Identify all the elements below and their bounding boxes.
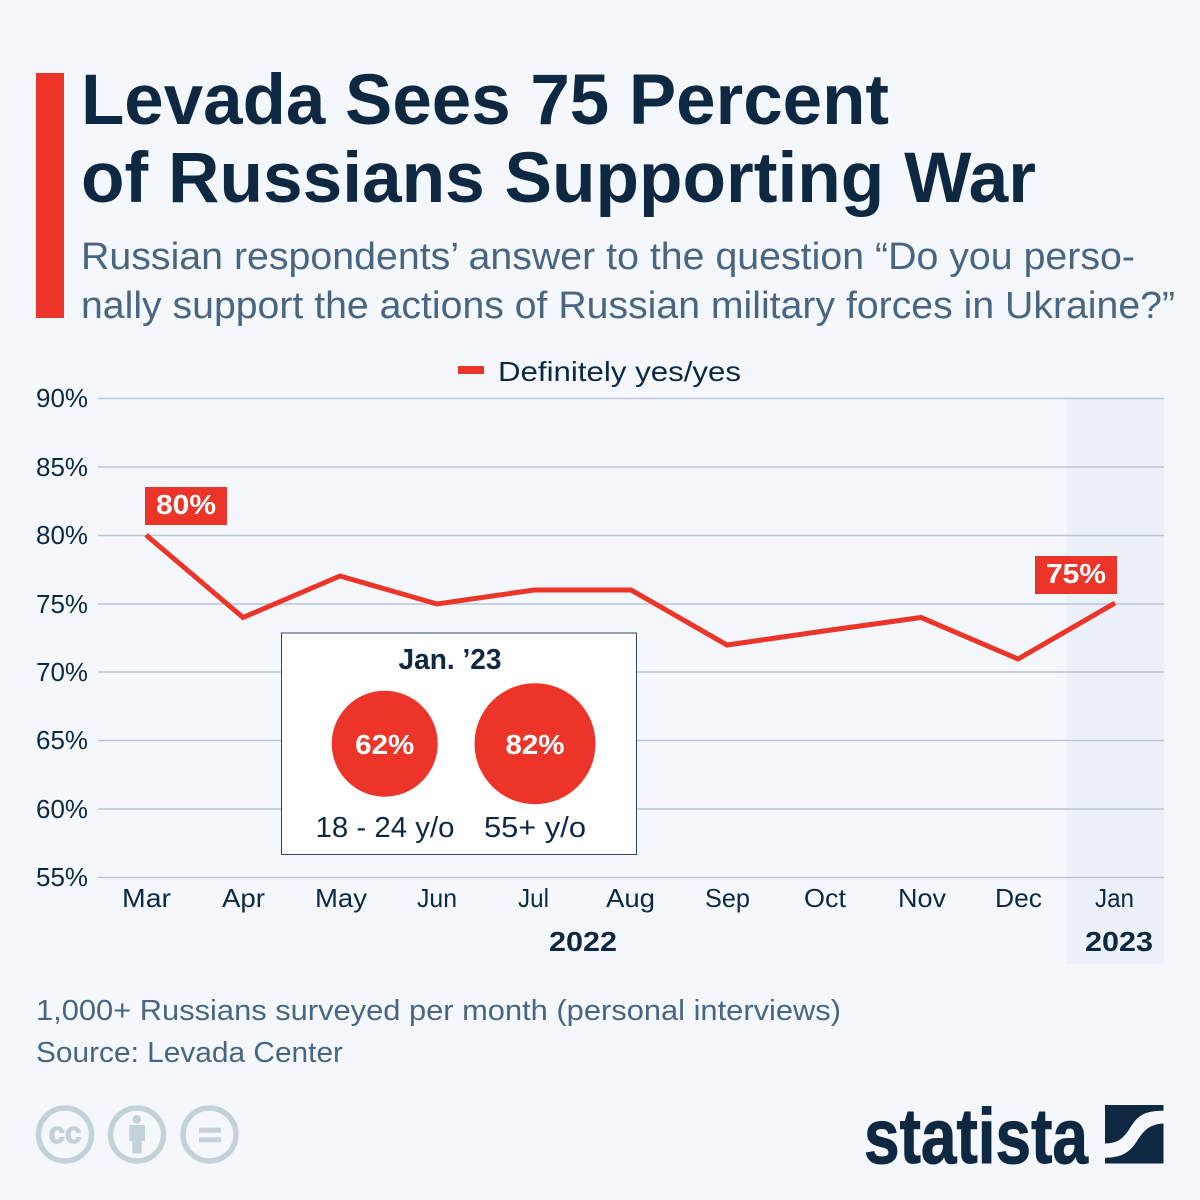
x axis month labels: Jun xyxy=(417,883,457,913)
y axis labels xyxy=(36,383,88,892)
x axis month labels: Oct xyxy=(804,883,847,913)
title: of Russians Supporting War xyxy=(81,139,1036,218)
accent bar xyxy=(36,73,64,318)
logo: statista: statista xyxy=(864,1092,1088,1180)
data label: 80% xyxy=(145,487,227,525)
subtitle: Russian respondents’ answer to the question “Do you perso- xyxy=(81,236,1135,278)
grid lines xyxy=(98,398,1164,878)
icon: cc xyxy=(38,1108,92,1161)
x axis month labels xyxy=(122,883,1134,913)
title: Levada Sees 75 Percent xyxy=(81,61,889,140)
highlight band: 2023 xyxy=(1067,398,1164,964)
x axis month labels: Jul xyxy=(518,883,549,913)
x axis month labels: Aug xyxy=(606,883,655,913)
bubble: 55+ xyxy=(474,683,596,804)
logo mark xyxy=(1105,1105,1164,1164)
data label: 80%: 80% xyxy=(156,489,216,520)
age label: 18-24: 18 - 24 y/o xyxy=(316,812,454,844)
source: Source: Levada Center xyxy=(36,1037,343,1069)
y axis labels: 90% xyxy=(36,383,88,413)
y axis labels: 55% xyxy=(36,862,88,892)
y axis labels: 75% xyxy=(36,589,88,619)
data label: 75% xyxy=(1035,556,1117,594)
x axis month labels: Nov xyxy=(898,883,946,913)
subtitle: nally support the actions of Russian military forces in Ukraine?” xyxy=(81,285,1175,327)
inset heading: Jan. ’23 xyxy=(398,644,502,676)
x axis month labels: Sep xyxy=(705,883,750,913)
y axis labels: 80% xyxy=(36,520,88,550)
y axis labels: 85% xyxy=(36,452,88,482)
x axis year labels xyxy=(549,926,1153,957)
icon: attribution xyxy=(110,1108,164,1161)
inset panel: Jan. '23 age groups xyxy=(282,633,636,854)
bubble: 18-24: 62% xyxy=(355,729,414,760)
icon: cc: cc xyxy=(48,1115,82,1150)
footnote: 1,000+ Russians surveyed per month (personal interviews) xyxy=(36,995,841,1027)
legend: Definitely yes/yes xyxy=(498,356,741,387)
x axis month labels: May xyxy=(315,883,367,913)
data label: 75%: 75% xyxy=(1046,558,1106,589)
x axis year labels: 2023 xyxy=(1085,926,1153,957)
x axis year labels: 2022 xyxy=(549,926,617,957)
x axis month labels: Mar xyxy=(122,883,171,913)
y axis labels: 60% xyxy=(36,794,88,824)
bubble: 18-24 xyxy=(332,691,438,797)
y axis labels: 70% xyxy=(36,657,88,687)
line series xyxy=(146,535,1115,659)
y axis labels: 65% xyxy=(36,725,88,755)
title xyxy=(81,61,1036,218)
x axis month labels: Jan xyxy=(1095,883,1134,913)
subtitle xyxy=(81,236,1175,327)
x axis month labels: Apr xyxy=(222,883,265,913)
icon: no derivatives xyxy=(183,1108,236,1161)
bubble: 55+: 82% xyxy=(506,729,565,760)
age label: 55+: 55+ y/o xyxy=(484,812,586,844)
x axis month labels: Dec xyxy=(995,883,1042,913)
